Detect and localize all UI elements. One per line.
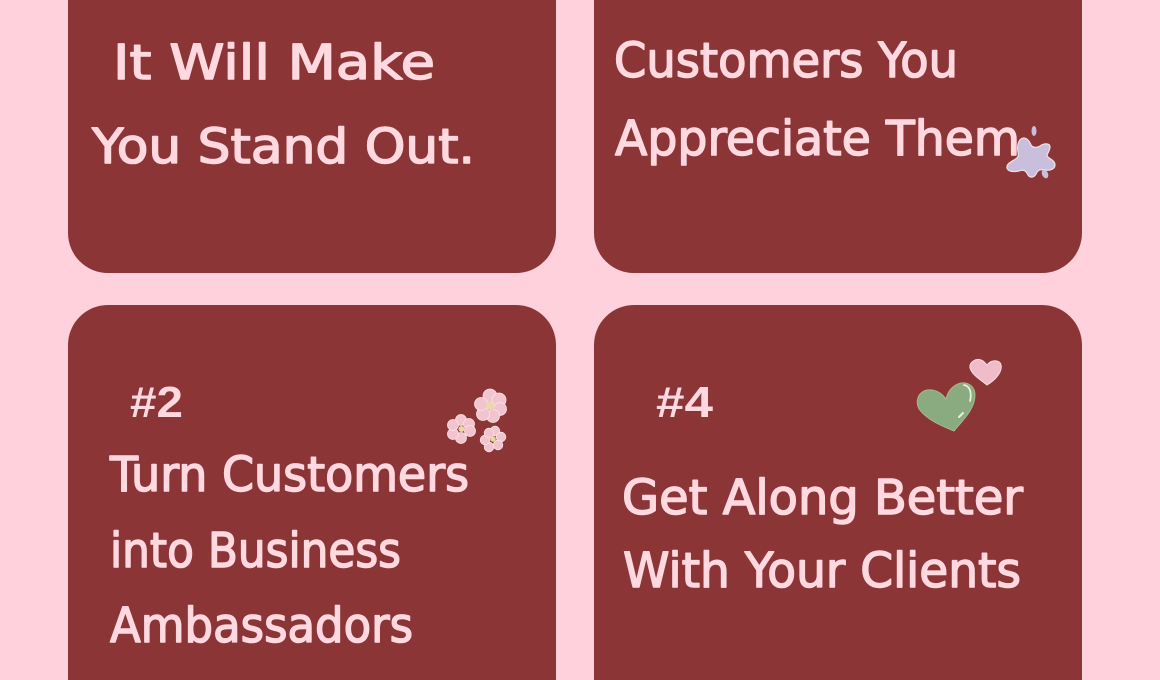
text: Turn Customers into Business Ambassadors: into Business: [110, 523, 401, 579]
text: It Will Make You Stand Out: It Will Make: [113, 35, 435, 91]
panel: bottom right card: [594, 305, 1082, 680]
text: Turn Customers into Business Ambassadors: Ambassadors: [110, 598, 413, 654]
text: Turn Customers into Business Ambassadors: Turn Customers: [109, 447, 469, 503]
text: It Will Make You Stand Out: [91, 35, 475, 175]
number: #2: #2: [130, 378, 183, 427]
text: It Will Make You Stand Out: You Stand Out.: [91, 119, 475, 175]
text: Customers You Appreciate Them: Appreciate Them: [615, 111, 1020, 167]
text: Customers You Appreciate Them: [614, 33, 1020, 167]
icon: three pink flowers: [448, 389, 506, 452]
panel: top left card: [68, 0, 556, 273]
panel: bottom left card: [68, 305, 556, 680]
text: Customers You Appreciate Them: Customers You: [614, 33, 958, 89]
text: Get Along Better With Your Clients: With Your Clients: [623, 543, 1021, 599]
icon: pink and green hearts: [917, 359, 1001, 431]
panel: top right card: [594, 0, 1082, 273]
number: #4: #4: [656, 378, 714, 427]
icon: lilac paint splat: [1007, 126, 1055, 179]
text: Get Along Better With Your Clients: [622, 470, 1023, 599]
text: Get Along Better With Your Clients: Get Along Better: [622, 470, 1023, 526]
text: Turn Customers into Business Ambassadors: [109, 447, 469, 654]
